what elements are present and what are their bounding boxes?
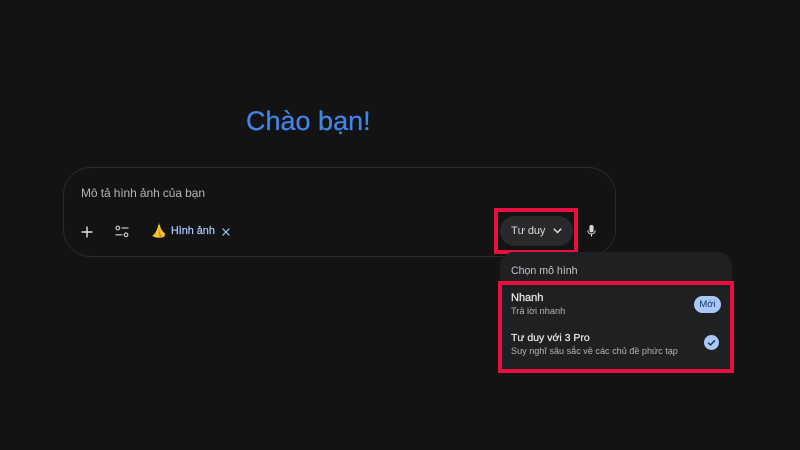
panel: model menu xyxy=(500,252,732,370)
icon: chevron xyxy=(553,228,562,234)
highlight frame: model options xyxy=(498,281,734,373)
badge: new: Mới xyxy=(699,299,716,310)
option: Pro title: Tư duy với 3 Pro xyxy=(511,332,590,344)
icon: close xyxy=(222,228,230,236)
badge: new xyxy=(694,296,721,313)
icon: selected check xyxy=(704,335,719,350)
icon: plus xyxy=(82,226,92,238)
mode button label: Tư duy xyxy=(511,225,545,237)
panel: prompt box xyxy=(63,167,616,257)
prompt placeholder text: Mô tả hình ảnh của bạn xyxy=(81,186,205,200)
icon: banana xyxy=(152,224,165,238)
tool chip label: Hình ảnh xyxy=(171,225,215,237)
option: Nhanh description: Trả lời nhanh xyxy=(511,306,565,316)
mode button xyxy=(500,216,573,246)
icon: microphone xyxy=(587,225,596,237)
menu heading: Chọn mô hình xyxy=(511,265,578,277)
option: Pro description: Suy nghĩ sâu sắc về các chủ đề phức tạp xyxy=(511,346,678,356)
option: Nhanh title: Nhanh xyxy=(511,292,543,304)
title: Chào bạn! xyxy=(246,106,371,136)
highlight frame: mode button xyxy=(494,208,578,254)
icon: settings sliders xyxy=(115,226,128,238)
